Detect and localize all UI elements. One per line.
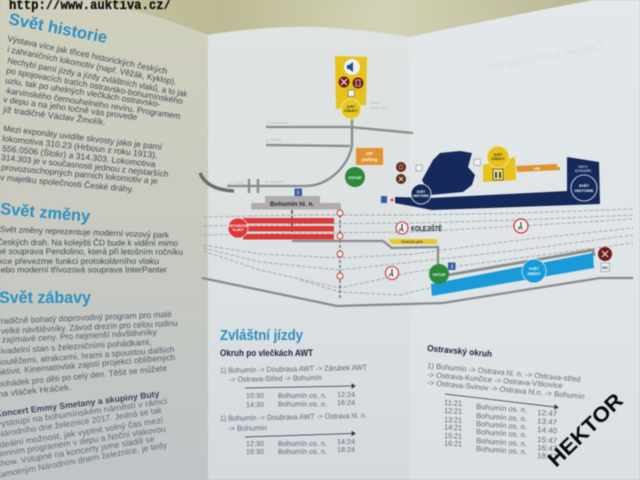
- text block: Svět historie intro: uzlu, tak po uhelných vlečkách ostravsko-: [5, 75, 162, 109]
- panel: navy history zone: [395, 151, 600, 210]
- timetable: departures: 11:21: [444, 398, 462, 408]
- label: depot: BOHUMÍN: [575, 168, 592, 173]
- text block: Svět zábavy: Tradičně bohatý doprovodný program pro malé: [0, 309, 172, 326]
- marker: Svět historie large: SVĚT: [579, 183, 590, 188]
- text block: concert: vystoupí na bohumínském náměstí v rámci: [0, 396, 168, 429]
- panel: left page: [0, 0, 208, 480]
- timetable: departures: [444, 398, 557, 461]
- text block: Svět historie intro: Nechybí parní jízdy a jízdy zvláštních vlaků, a to jak: [7, 55, 189, 99]
- markers: crossings: [337, 210, 343, 279]
- heading: Svět zábavy: Svět zábavy: [0, 289, 92, 307]
- label: VIP: VIP: [534, 166, 541, 171]
- timetable: departures: 16:21: [444, 439, 462, 448]
- timetable: route 2: 16:30: [246, 447, 264, 456]
- icons: food and drink: [396, 162, 406, 184]
- road labels: ul. Ruská: [266, 138, 281, 142]
- timetable: departures: 13:47: [537, 417, 557, 427]
- road labels: [228, 101, 388, 185]
- icon: speaker: [344, 59, 360, 75]
- timetable: route 1: 14:30: [246, 400, 264, 409]
- label: VIP: [516, 164, 560, 172]
- icon: family: [493, 169, 503, 180]
- text block: Svět zábavy: divadelní stan s železničními pohádkami,: [0, 337, 152, 356]
- marker: entrance east: VSTUP: [432, 272, 446, 277]
- timetable: route 1: 12:24: [337, 390, 355, 399]
- panel: yellow family zone: [483, 146, 516, 182]
- timetable: route 1: -> Ostrava-Střed -> Bohumín: [229, 373, 322, 384]
- text block: exhibits: provozuschopných parních lokomotiv a je: [1, 162, 158, 186]
- timetable: route 1: 10:30: [246, 391, 264, 400]
- label: VIP parking: parking: [362, 157, 378, 162]
- timetable: route 2: [220, 411, 367, 456]
- road labels: vstup depo: [370, 106, 388, 110]
- panel: yellow family zone: ZÁBAVY: [491, 156, 506, 161]
- label: KOLEJIŠTĚ: KOLEJIŠTĚ: [411, 224, 442, 233]
- panel: blue modern zone: [431, 253, 594, 296]
- text block: Svět historie intro: v depu a na jeho točně vás provede: [3, 94, 138, 122]
- icons: info and first aid: [381, 196, 395, 203]
- subheading: Ostravský okruh: Ostravský okruh: [427, 343, 492, 359]
- timetable: departures: Bohumín os. n.: [476, 411, 527, 424]
- timetable: departures: 14:40: [537, 425, 557, 435]
- panel: red platforms: [228, 218, 334, 240]
- arrow: [245, 432, 355, 437]
- marker: Svět zábavy: SVĚT: [347, 104, 356, 109]
- tracks: [203, 209, 633, 300]
- timetable: departures: Bohumín os. n.: [476, 419, 527, 432]
- route description: 1) Bohumín -> Ostrava hl. n. -> Ostrava-střed: [427, 361, 581, 384]
- icon: info: [294, 188, 302, 196]
- text block: Svět zábavy: [0, 309, 178, 399]
- road labels: ul. Ludvík: [228, 181, 244, 185]
- icons: small WC boxes: [416, 159, 480, 171]
- timetable: departures: 12:47: [537, 408, 557, 418]
- text block: Svět zábavy: aktivit. Kinematovlak zajistí projekci oblíbených: [0, 352, 176, 377]
- text block: concert: Národního dne železnice 2017. Jedná se tak: [0, 405, 163, 439]
- label: VIP parking: VIP: [366, 151, 373, 156]
- text block: Svět zábavy: pohádek pro děti po celý den. Těšit se můžete: [0, 363, 168, 389]
- icon: food: [338, 76, 350, 88]
- panel: yellow entertainment zone: [335, 56, 367, 119]
- text block: Svět historie intro: -karvinského černouhelného revíru. Programem: [4, 85, 181, 121]
- text block: Svět historie intro: i zahraničních lokomotiv (např. Věžák, Kyklop).: [7, 44, 177, 87]
- panel: right page: [409, 0, 640, 480]
- text block: Svět historie intro: již tradičně Václav Žmolík.: [2, 104, 106, 127]
- timetable: departures: 15:47: [537, 435, 557, 445]
- label: depot: DEPO: [578, 165, 588, 169]
- label: yellow walkway: Chod pro pěší: [401, 240, 423, 244]
- timetable: route 2: 12:30: [246, 439, 264, 448]
- timetable: departures: Bohumín os. n.: [476, 444, 527, 457]
- route description: -> Ostrava-Kunčice -> Ostrava-Vítkovice: [427, 370, 563, 390]
- section: Svět zábavy: [0, 289, 178, 480]
- panel: red platforms: HISTORICKÉ: [228, 223, 249, 228]
- road labels: Hlavní: [370, 101, 380, 105]
- text block: Svět změny: [0, 224, 183, 274]
- text block: concert: ideální možnost, jak vyplnit volný čas mezi: [0, 415, 164, 450]
- icon: food east: [598, 247, 612, 261]
- marker: Svět zábavy: ZÁBAVY: [344, 108, 359, 113]
- watermark: HEKTOR: HEKTOR: [543, 389, 628, 472]
- section: Svět změny: [0, 200, 183, 274]
- timetable: route 1: Bohumín os. n.: [278, 400, 327, 408]
- timetable: route 2: -> Bohumín: [228, 423, 267, 433]
- section: Ostravský okruh: [427, 343, 585, 461]
- timetable: route 2: 1) Bohumín -> Doubrava AWT -> Ostrava hl. n.: [220, 411, 367, 423]
- road labels: ul. Nádražní: [265, 180, 284, 184]
- timetable: departures: 18:47: [537, 451, 557, 461]
- text block: concert: show. Vstupné na koncerty jsme sladili se: [0, 433, 156, 469]
- text block: Svět zábavy: i velké návštěvníky. Závod drezín pro celou rodinu: [0, 318, 178, 336]
- marker: Svět historie small: [411, 184, 431, 204]
- text block: Svět změny: Českých drah. Na kolejišti ČD bude k vidění mimo: [0, 237, 178, 248]
- marker: entrance east: [429, 264, 449, 284]
- icon: no pedestrians, lower: [386, 266, 398, 280]
- icon: WC east: WC: [602, 266, 609, 270]
- building: station: [251, 196, 341, 210]
- map: site plan: [200, 56, 633, 306]
- text block: Svět zábavy: soutěžemi, atrakcemi, hrami a spoustou dalších: [0, 344, 175, 367]
- text block: exhibits: 556.0506 (Štokr) a 314.303. Lokomotiva: [2, 143, 156, 169]
- timetable: departures: 13:21: [444, 415, 462, 425]
- text block: exhibits: [0, 123, 169, 194]
- marker: Svět historie large: HISTORIE: [575, 188, 594, 193]
- timetable: departures: 15:21: [444, 431, 462, 441]
- text block: exhibits: lokomotiva 310.23 (Hrboun z roku 1913),: [2, 133, 158, 160]
- label: VIP parking: [356, 148, 383, 165]
- timetable: route 2: Bohumín os. n.: [278, 447, 327, 456]
- icon: info: i: [297, 190, 299, 196]
- subheading: Okruh po vlečkách AWT: Okruh po vlečkách AWT: [220, 348, 314, 358]
- timetable: departures: 12:21: [444, 406, 462, 416]
- icon: no pedestrians, right: [514, 219, 528, 233]
- panel: red platforms: VLAKY: [232, 228, 244, 232]
- building: station: Bohumín hl. n.: [270, 201, 314, 208]
- text block: concert: samotným Národním dnem železnice, je tedy: [0, 439, 168, 480]
- text block: exhibits: Mezi exponáty uvidíte skvosty jako je parní: [3, 123, 163, 152]
- timetable: departures: Bohumín os. n.: [476, 402, 527, 415]
- panel: yellow family zone: SVĚT: [494, 152, 503, 157]
- text block: Svět historie intro: po spojovacích tratích ostravsko-bohumínského: [6, 65, 184, 106]
- timetable: departures: 14:21: [444, 423, 462, 432]
- text block: exhibits: 314.303 je v současnosti jednou z nejstarších: [1, 152, 169, 179]
- heading: Zvláštní jízdy: Zvláštní jízdy: [220, 328, 303, 344]
- arrow: [245, 384, 355, 388]
- timetable: route 2: 14:24: [337, 437, 355, 446]
- marker: Svět historie small: HISTORIE: [413, 194, 430, 198]
- timetable: route 2: Bohumín os. n.: [278, 439, 327, 448]
- text block: Svět historie intro: Výstava více jak třiceti historických českých: [7, 33, 169, 76]
- route description: [427, 361, 585, 401]
- heading: Svět historie: Svět historie: [7, 10, 109, 47]
- timetable: departures: Bohumín os. n.: [476, 427, 527, 440]
- roads: [200, 118, 633, 306]
- icon: WC east: [601, 263, 610, 272]
- marker: entrance north: [345, 167, 365, 187]
- text block: concert: [0, 389, 168, 480]
- icon: WC: [348, 90, 354, 96]
- text block: exhibits: v majetku společnosti České dráhy.: [0, 172, 134, 194]
- icon: info east: [448, 262, 456, 270]
- heading: Svět změny: Svět změny: [0, 200, 92, 226]
- timetable: route 1: [220, 363, 367, 409]
- route description: -> Ostrava-Svinov -> Ostrava hl.n. -> Bohumín: [427, 378, 585, 401]
- timetable: departures: 16:47: [537, 443, 557, 453]
- road labels: ul. Studentská: [266, 121, 289, 125]
- timetable: departures: Bohumín os. n.: [476, 436, 527, 449]
- marker: Svět zábavy: [341, 99, 361, 119]
- panel: centre map page: [208, 27, 410, 480]
- show-through heading on right page: Časové harmonogram: [486, 38, 606, 74]
- timetable: route 1: 16:24: [337, 398, 355, 407]
- icon: info east: i: [451, 264, 453, 270]
- section: Svět historie: [0, 10, 189, 194]
- arrow: [445, 394, 558, 409]
- text block: concert: denním programem v depu a Noční vlakovou: [0, 423, 167, 459]
- text block: Svět změny: Svět změny reprezentuje moderní vozový park: [0, 224, 170, 240]
- icon: drinks: [352, 78, 364, 88]
- timetable: route 1: Bohumín os. n.: [278, 391, 327, 400]
- text block: Svět změny: nebo moderní třívozová souprava InterPanter: [0, 264, 167, 274]
- label: depot: [575, 165, 592, 173]
- icon: no pedestrians, track: [396, 222, 408, 234]
- text block: Svět historie intro: [2, 33, 189, 127]
- section: Zvláštní jízdy: [220, 328, 367, 456]
- panel: blue modern zone: SVĚT: [529, 266, 540, 271]
- marker: Svět historie small: SVĚT: [417, 189, 426, 194]
- panel: blue modern zone: ZMĚNY: [527, 271, 541, 276]
- label: yellow walkway: [388, 239, 437, 244]
- marker: Svět historie large: [571, 175, 597, 201]
- marker: entrance north: VSTUP: [348, 175, 362, 180]
- timetable: route 2: 18:24: [337, 445, 355, 454]
- timetable: route 1: 1) Bohumín -> Doubrava AWT -> Zárubek AWT: [220, 363, 367, 375]
